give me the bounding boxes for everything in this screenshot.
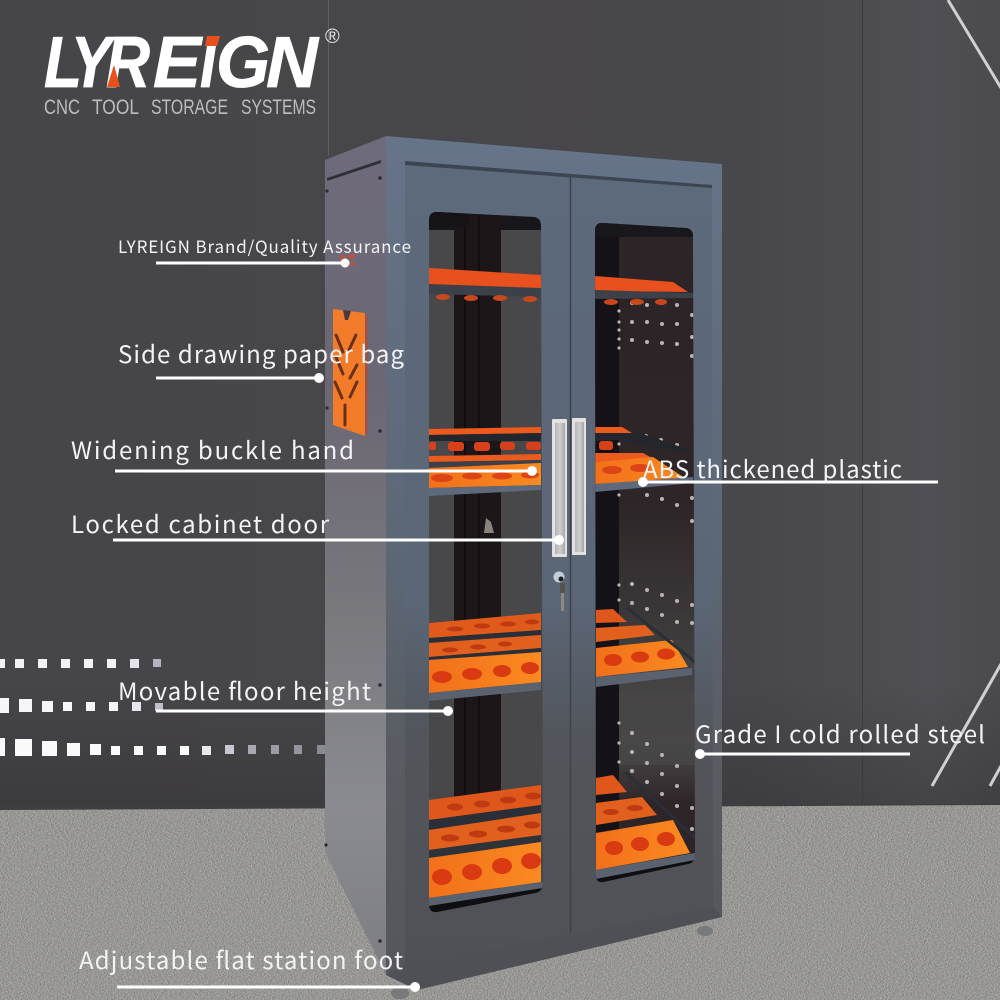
logo tagline	[44, 96, 316, 119]
cabinet feet	[391, 926, 713, 999]
callout: movable floor height: Movable floor height	[118, 672, 371, 707]
logo wordmark: N	[266, 23, 320, 103]
logo tagline: TOOL	[92, 96, 139, 119]
cabinet front frame	[386, 136, 722, 990]
logo wordmark: E	[153, 23, 203, 103]
door lock and key	[554, 572, 565, 611]
brand badge on side	[340, 254, 355, 266]
right shelf 4	[596, 772, 695, 888]
right shelf 1	[595, 276, 693, 305]
cabinet side panel	[324, 136, 386, 975]
light dots row 3	[0, 738, 325, 756]
left shelf 4	[429, 785, 543, 914]
logo wordmark	[44, 23, 320, 103]
floor	[0, 805, 1000, 1000]
logo wordmark: Y	[71, 23, 116, 103]
logo wordmark: G	[216, 23, 270, 103]
left shelf 1	[429, 268, 541, 302]
callout: grade I cold rolled steel: Grade I cold rolled steel	[695, 715, 985, 750]
callout: adjustable flat station foot: Adjustable flat station foot	[79, 941, 403, 976]
left shelf 3	[429, 613, 541, 701]
callout: ABS thickened plastic: ABS thickened plastic	[643, 450, 902, 485]
callout: locked cabinet door	[71, 505, 564, 545]
door centre seam	[570, 174, 572, 933]
logo wordmark: R	[106, 23, 150, 103]
callout: widening buckle hand	[71, 431, 537, 476]
side drawing paper bag	[333, 309, 368, 436]
column latch	[484, 518, 494, 533]
door handles	[552, 418, 586, 557]
callout: locked cabinet door: Locked cabinet door	[71, 505, 330, 540]
callout: side drawing paper bag: Side drawing paper bag	[118, 335, 404, 370]
perforated back panel	[617, 301, 694, 831]
logo	[44, 23, 340, 119]
wall light dots	[0, 659, 325, 756]
light dots row 1	[0, 659, 161, 668]
right door window	[595, 223, 695, 882]
callout: widening buckle hand: Widening buckle hand	[71, 431, 354, 466]
right shelf 3	[596, 608, 695, 687]
cabinet	[324, 136, 722, 999]
logo wordmark: I	[200, 23, 218, 103]
logo tagline: SYSTEMS	[241, 96, 316, 119]
logo wordmark: L	[44, 23, 82, 103]
left shelf 2	[429, 427, 541, 496]
registered mark: ®	[325, 26, 340, 48]
wall base edge	[0, 804, 1000, 810]
door top lip	[405, 161, 712, 188]
logo orange accents	[107, 34, 222, 87]
diagonal light strips	[932, 0, 1000, 786]
callout: movable floor height	[118, 672, 453, 716]
right shelf 2	[595, 427, 693, 492]
left door window	[429, 212, 543, 912]
cabinet base strip	[386, 906, 722, 990]
cabinet doors	[405, 162, 713, 965]
callout: adjustable flat station foot	[79, 941, 420, 992]
logo tagline: STORAGE	[151, 96, 228, 119]
logo tagline: CNC	[44, 96, 80, 119]
light dots row 2	[0, 698, 163, 713]
callout: brand: LYREIGN Brand/Quality Assurance	[118, 233, 411, 258]
